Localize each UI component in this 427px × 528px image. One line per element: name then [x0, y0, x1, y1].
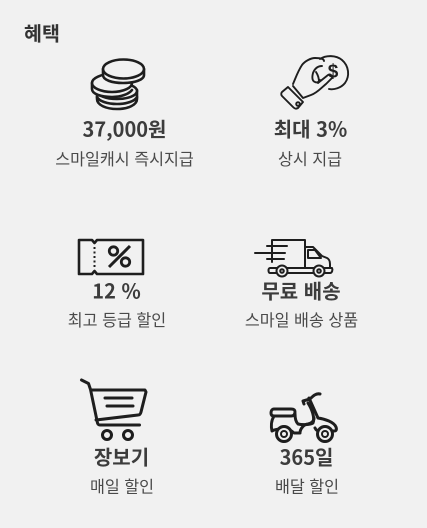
- panel: 37,000 won benefit: [55, 60, 194, 170]
- icon: scooter: [271, 394, 336, 442]
- heading: 12 %: 12 %: [92, 276, 141, 304]
- icon: percent coupon: [79, 240, 143, 274]
- title: 혜택: [24, 18, 60, 46]
- panel: jangbogi: [82, 380, 154, 498]
- text: 배달 할인: 배달 할인: [275, 474, 339, 498]
- heading: 37,000원: 37,000원: [83, 114, 166, 142]
- heading: 최대 3%: 최대 3%: [274, 114, 347, 142]
- text: 상시 지급: 상시 지급: [278, 146, 342, 170]
- panel: 365 days: [271, 394, 339, 498]
- panel: 3% benefit: [274, 56, 348, 170]
- panel: 12% benefit: [68, 240, 166, 331]
- heading: 장보기: 장보기: [94, 442, 149, 470]
- text: 스마일 배송 상품: 스마일 배송 상품: [245, 307, 358, 331]
- heading: 365일: 365일: [280, 442, 333, 470]
- icon: hand with dollar coin: $: [328, 62, 339, 82]
- icon: shopping cart: [82, 380, 146, 440]
- panel: free delivery: [245, 240, 358, 331]
- icon: coins: [92, 60, 144, 109]
- text: 스마일캐시 즉시지급: 스마일캐시 즉시지급: [55, 146, 194, 170]
- text: 매일 할인: 매일 할인: [90, 474, 154, 498]
- text: 최고 등급 할인: 최고 등급 할인: [68, 307, 166, 331]
- icon: delivery truck: [255, 240, 332, 276]
- heading: 무료 배송: 무료 배송: [261, 276, 341, 304]
